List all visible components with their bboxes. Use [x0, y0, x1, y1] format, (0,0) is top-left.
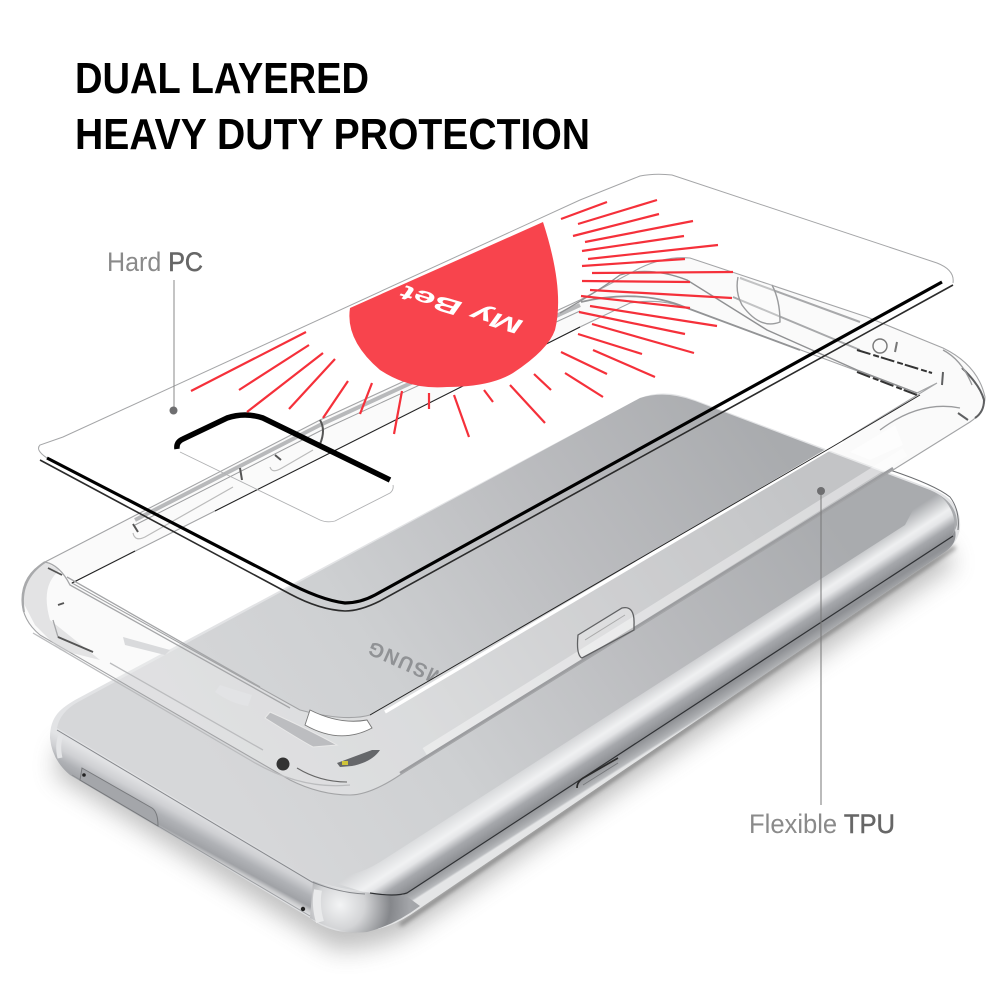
title: DUAL LAYERED — [75, 54, 369, 103]
callout: Hard PC — [107, 247, 203, 414]
right corner accents — [942, 368, 984, 420]
lower-right edge tint — [400, 468, 893, 773]
seam left lower — [72, 775, 310, 916]
left outer edge — [23, 562, 45, 612]
antenna band bottom — [317, 890, 320, 922]
camera-side mark — [895, 342, 897, 352]
port dot — [82, 773, 86, 777]
top-left inner line — [72, 327, 580, 583]
speaker holes — [857, 350, 932, 395]
phone — [50, 393, 960, 950]
title: HEAVY DUTY PROTECTION — [75, 110, 590, 159]
phone bottom corner — [310, 881, 420, 932]
callout: Hard PC: Hard PC — [107, 247, 203, 277]
plate outline — [39, 174, 953, 458]
lower-left outer rail — [33, 633, 350, 786]
volume button lower line — [583, 763, 618, 785]
left corner glass — [22, 562, 100, 660]
top rail lower — [581, 296, 800, 350]
outer top-right outline — [890, 470, 958, 530]
sun rays — [191, 200, 733, 437]
camera cutout bold edge — [177, 415, 390, 480]
case ring — [22, 258, 985, 795]
camera cutout thin edge — [180, 452, 393, 522]
red drop print — [349, 222, 558, 387]
side button — [578, 608, 634, 658]
camera opening — [737, 277, 780, 324]
phone drop shadow — [55, 540, 955, 950]
interior corner shape — [265, 712, 337, 747]
title — [75, 54, 590, 159]
antenna band left — [59, 735, 61, 758]
left corner detail — [45, 562, 290, 708]
bixby button — [80, 768, 158, 826]
callout: Flexible TPU — [749, 487, 895, 839]
microphone cutout — [276, 758, 290, 770]
seam left — [57, 730, 365, 894]
phone body — [50, 393, 960, 932]
left band patch — [123, 637, 170, 655]
lower corner dark marks — [297, 768, 347, 782]
flash led — [342, 761, 348, 765]
inner corner glare — [305, 710, 372, 736]
phone edge contact shadow — [400, 547, 955, 925]
top-left clip marks — [133, 420, 323, 532]
clear TPU case — [22, 258, 985, 795]
phone right side — [378, 530, 956, 929]
white inner stripe — [385, 441, 843, 712]
callout: Flexible TPU: Flexible TPU — [749, 809, 895, 839]
lower thin edge — [40, 285, 953, 611]
dark seam right — [370, 536, 953, 895]
button line — [585, 615, 625, 640]
flash ring — [873, 339, 887, 353]
top-left rail line — [135, 311, 580, 525]
top lip — [560, 271, 917, 393]
flash window — [337, 750, 380, 767]
top rail upper — [733, 278, 860, 350]
top-left rail — [135, 305, 580, 520]
top-left button outlines — [133, 450, 313, 539]
lower bold edge — [47, 282, 942, 603]
lower-right rail — [425, 452, 905, 752]
brand text: SAMSUNG — [364, 636, 476, 702]
right corner highlight — [850, 425, 903, 460]
volume button — [577, 758, 618, 788]
hard PC plate — [39, 174, 953, 611]
left corner accents — [48, 568, 93, 652]
phone back surface — [57, 395, 957, 895]
inner edge line — [370, 395, 920, 715]
pin hole — [301, 907, 305, 911]
right edge gloss band — [320, 487, 955, 895]
charging clip marks — [215, 685, 252, 706]
right corner inner curve — [880, 350, 972, 430]
print text: My Bet — [396, 280, 525, 340]
